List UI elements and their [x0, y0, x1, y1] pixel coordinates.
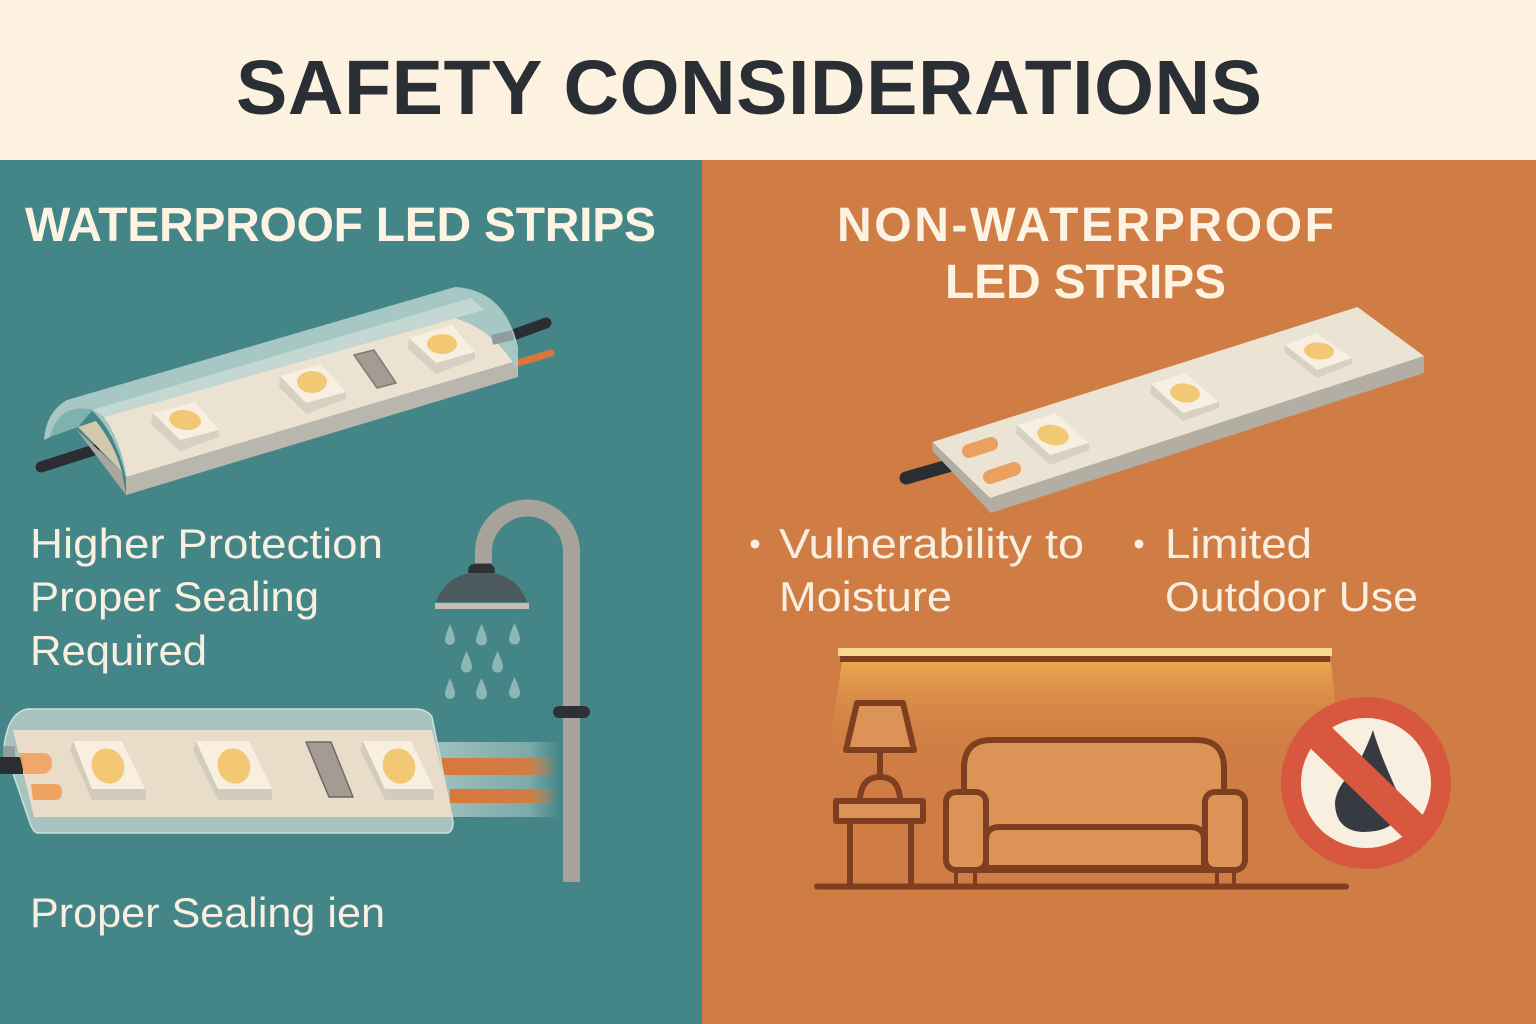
header band	[0, 0, 1536, 160]
water drops	[445, 623, 520, 700]
illustration: bare LED strip	[906, 307, 1424, 513]
title: SAFETY CONSIDERATIONS	[236, 45, 1262, 131]
sofa	[946, 740, 1245, 885]
LED chip 2	[1150, 373, 1219, 421]
table lamp	[846, 703, 914, 798]
heading: waterproof: WATERPROOF LED STRIPS	[25, 199, 656, 252]
text: higher protection: Required	[30, 627, 207, 674]
resistor	[306, 742, 353, 797]
text: higher protection: Higher Protection	[30, 520, 383, 567]
LED chip 1	[151, 402, 219, 451]
heading: non-waterproof: LED STRIPS	[945, 256, 1226, 309]
panel: non-waterproof LED strips	[702, 160, 1536, 1024]
illustration: sealed strip close-up	[0, 709, 560, 833]
bullet: limited outdoor use: Limited	[1165, 520, 1312, 567]
LED chip 3	[1284, 333, 1352, 378]
bullet: vulnerability to moisture	[750, 520, 1084, 620]
illustration: encapsulated LED strip	[41, 287, 551, 495]
heading: non-waterproof	[837, 199, 1334, 309]
heading: non-waterproof: NON-WATERPROOF	[837, 199, 1334, 252]
text: proper sealing: Proper Sealing ien	[30, 889, 385, 936]
LED chip 3	[408, 325, 475, 374]
illustration: shower	[435, 508, 590, 882]
solder pads	[969, 444, 1014, 477]
bullet: vulnerability to moisture: Vulnerability to	[779, 520, 1084, 567]
text: higher protection: Proper Sealing	[30, 573, 319, 620]
icon: no water sign	[1281, 697, 1451, 869]
LED chips	[70, 741, 434, 800]
text: higher protection	[30, 520, 383, 674]
bullet: limited outdoor use	[1134, 520, 1418, 620]
solder pads	[19, 753, 62, 800]
floor line	[817, 884, 1346, 890]
LED chip 2	[279, 364, 346, 414]
bullet: limited outdoor use: Outdoor Use	[1165, 573, 1418, 620]
illustration: living room	[817, 648, 1346, 886]
resistor	[354, 350, 396, 388]
LED chip 1	[1016, 413, 1089, 465]
panel: waterproof LED strips	[0, 160, 702, 1024]
bullet: vulnerability to moisture: Moisture	[779, 573, 952, 620]
side table	[836, 801, 923, 885]
